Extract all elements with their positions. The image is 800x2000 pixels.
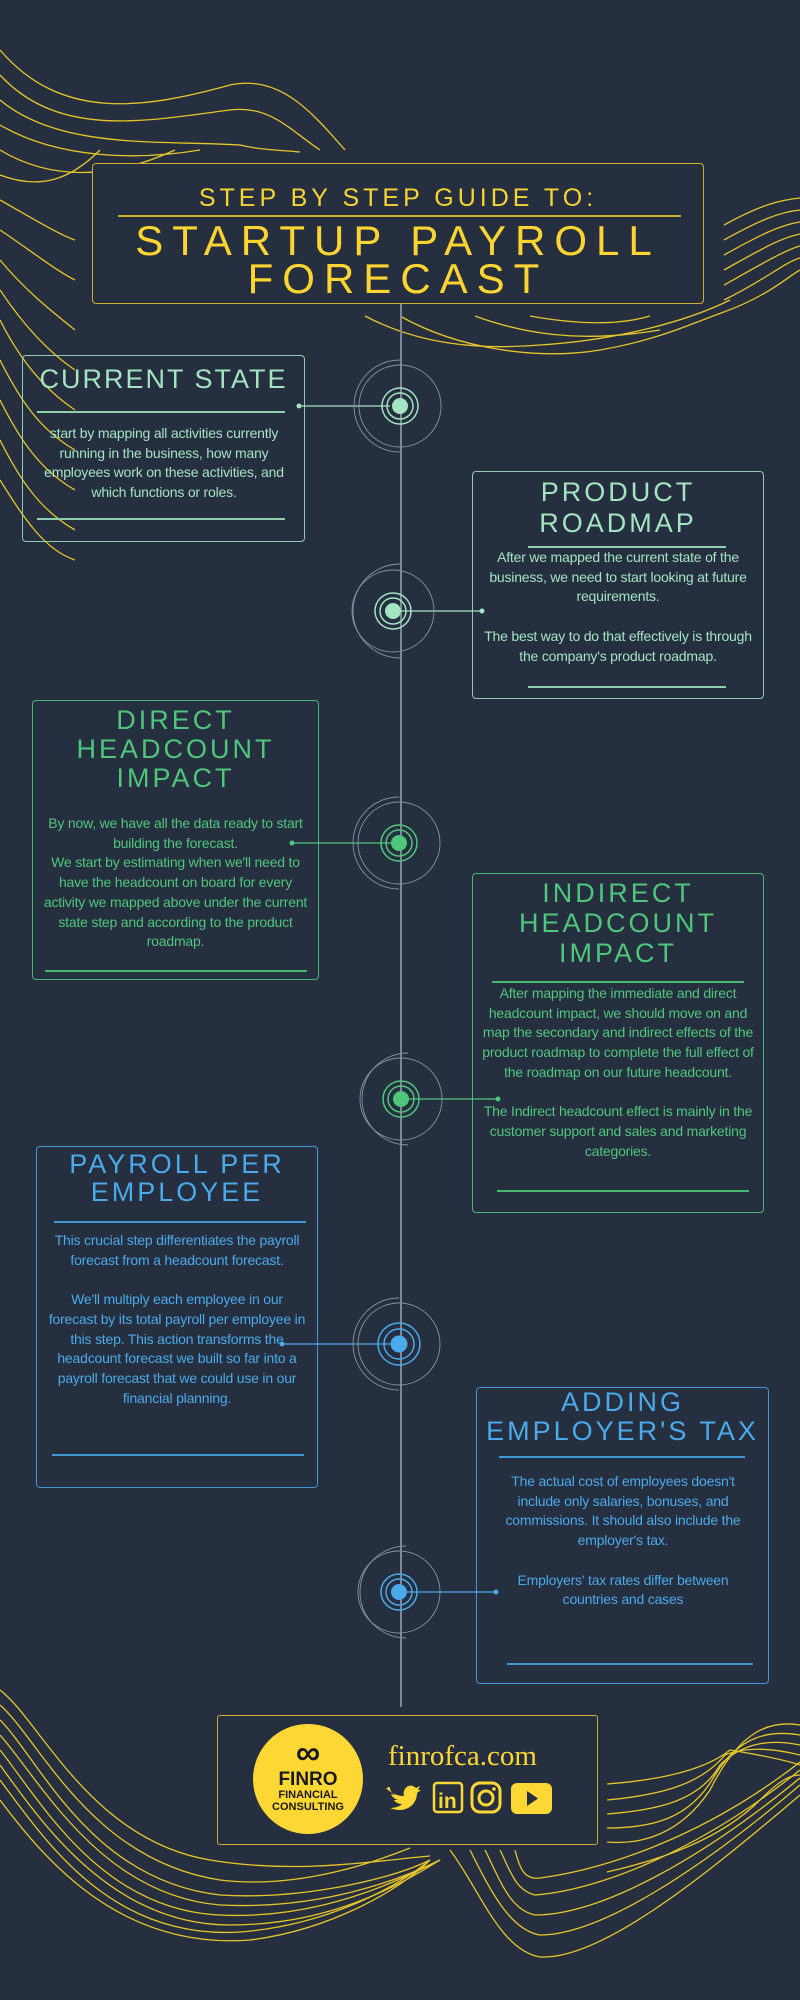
heading bbox=[539, 477, 697, 538]
title box bbox=[92, 163, 704, 304]
panel: adding employer's tax bbox=[476, 1387, 769, 1684]
logo: CONSULTING bbox=[272, 1801, 344, 1813]
connector: direct headcount bbox=[290, 796, 440, 890]
text bbox=[506, 1473, 740, 1607]
text: Employers' tax rates differ between countries and cases bbox=[518, 1572, 728, 1607]
heading: IMPACT bbox=[116, 763, 234, 793]
text: By now, we have all the data ready to start building the forecast. bbox=[48, 815, 303, 851]
logo bbox=[253, 1724, 363, 1834]
timeline vertical line bbox=[400, 304, 402, 1707]
text: We'll multiply each employee in our forecast by its total payroll per employee in this step. This action transforms the headcount forecast we built so far into a payroll forecast that we could use in our financial planning. bbox=[49, 1291, 305, 1406]
heading: HEADCOUNT bbox=[519, 908, 717, 938]
text: The best way to do that effectively is through the company's product roadmap. bbox=[484, 628, 752, 664]
main title: FORECAST bbox=[248, 255, 548, 302]
text: start by mapping all activities currently running in the business, how many employees work on these activities, and which functions or roles. bbox=[44, 425, 284, 500]
heading: HEADCOUNT bbox=[76, 734, 274, 764]
panel: current state bbox=[22, 355, 305, 542]
text: After mapping the immediate and direct headcount impact, we should move on and map the secondary and indirect effects of the product roadmap to complete the full effect of the roadmap on our future headcount. bbox=[482, 985, 754, 1080]
heading: ROADMAP bbox=[539, 508, 697, 538]
heading: PAYROLL PER bbox=[69, 1149, 285, 1179]
text bbox=[49, 1232, 305, 1406]
heading: INDIRECT bbox=[542, 878, 694, 908]
text bbox=[482, 985, 754, 1159]
text bbox=[484, 549, 752, 664]
heading: CURRENT STATE bbox=[39, 364, 288, 394]
heading bbox=[69, 1149, 285, 1207]
connector: payroll per employee bbox=[280, 1298, 440, 1390]
panel: indirect headcount impact bbox=[472, 873, 764, 1213]
heading: EMPLOYER'S TAX bbox=[486, 1416, 759, 1446]
website: finrofca.com bbox=[388, 1740, 537, 1772]
logo: FINANCIAL bbox=[278, 1789, 338, 1801]
text: The actual cost of employees doesn't include only salaries, bonuses, and commissions. It should also include the employer's tax. bbox=[506, 1473, 740, 1548]
footer box bbox=[217, 1715, 598, 1845]
text: The Indirect headcount effect is mainly in the customer support and sales and marketing categories. bbox=[484, 1103, 752, 1159]
connector: employer's tax bbox=[358, 1546, 498, 1638]
panel: direct headcount impact bbox=[32, 700, 319, 980]
subtitle: STEP BY STEP GUIDE TO: bbox=[199, 184, 597, 212]
connector: current state bbox=[296, 360, 442, 452]
heading: DIRECT bbox=[116, 705, 235, 735]
icons: social: in bbox=[438, 1790, 457, 1813]
heading: EMPLOYEE bbox=[91, 1177, 263, 1207]
panel: product roadmap bbox=[472, 471, 764, 699]
heading: PRODUCT bbox=[541, 477, 695, 507]
main title: STARTUP PAYROLL bbox=[135, 217, 661, 264]
main title bbox=[135, 217, 661, 302]
text: After we mapped the current state of the business, we need to start looking at future requirements. bbox=[489, 549, 747, 604]
heading: ADDING bbox=[561, 1387, 684, 1417]
heading bbox=[76, 705, 274, 793]
text: This crucial step differentiates the payroll forecast from a headcount forecast. bbox=[55, 1232, 299, 1268]
heading: IMPACT bbox=[559, 938, 677, 968]
panel: payroll per employee bbox=[36, 1146, 318, 1488]
connector: indirect headcount bbox=[360, 1052, 500, 1146]
logo: FINRO bbox=[278, 1769, 338, 1790]
heading bbox=[519, 878, 717, 968]
text: We start by estimating when we'll need to have the headcount on board for every activity we mapped above under the current state step and according to the product roadmap. bbox=[44, 854, 307, 949]
logo: ∞ bbox=[296, 1734, 320, 1772]
heading bbox=[486, 1387, 759, 1446]
icons: social bbox=[386, 1782, 552, 1814]
connector: product roadmap bbox=[352, 564, 484, 658]
